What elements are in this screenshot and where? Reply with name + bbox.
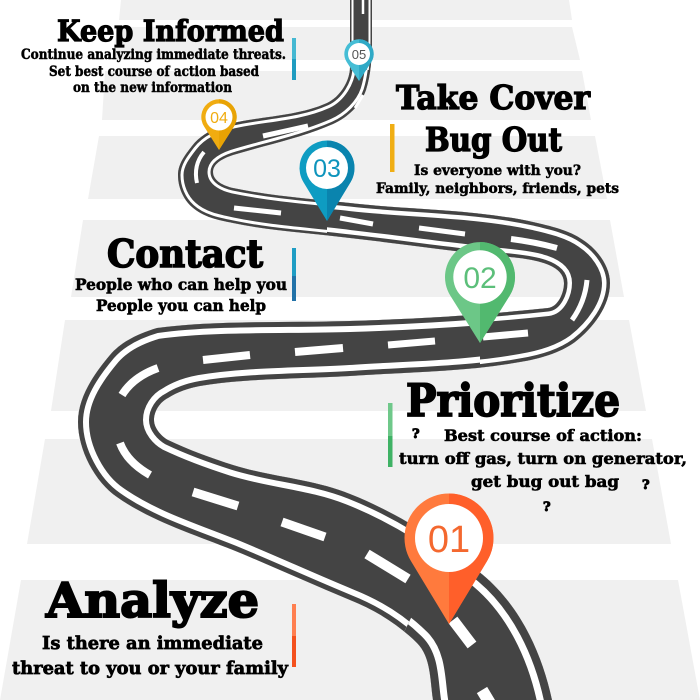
- road centre dashes: [120, 0, 587, 700]
- pin 03: 03: [313, 155, 341, 183]
- text block: prioritize: Prioritize: [406, 374, 620, 427]
- accent bar: contact: [292, 248, 296, 301]
- text block: keep informed: on the new information: [73, 80, 232, 96]
- text block: prioritize: get bug out bag: [471, 472, 619, 491]
- accent bar: analyze: [292, 604, 296, 667]
- pin 05: [344, 39, 374, 81]
- pin 05: 05: [352, 47, 366, 62]
- text block: take cover, bug out: Bug Out: [425, 120, 562, 159]
- text block: keep informed: Set best course of action based: [49, 64, 259, 80]
- text block: take cover, bug out: Family, neighbors, friends, pets: [376, 181, 619, 197]
- text block: contact: People who can help you: [75, 275, 287, 294]
- pin 02: [445, 242, 515, 343]
- accent bar: prioritize: [388, 403, 392, 467]
- pin 01: [405, 494, 494, 624]
- text block: keep informed: Keep Informed: [57, 14, 284, 48]
- text block: take cover, bug out: Is everyone with you?: [414, 163, 581, 179]
- pin 01: 01: [428, 519, 470, 561]
- text block: contact: People you can help: [96, 296, 266, 315]
- accent bar: keep informed: [292, 38, 296, 80]
- pin 02: 02: [463, 262, 497, 295]
- text block: prioritize: ?: [642, 478, 650, 493]
- winding road: [78, 0, 610, 700]
- text block: keep informed: [21, 14, 286, 96]
- text block: analyze: threat to you or your family: [12, 658, 289, 679]
- accent bar: take cover: [390, 124, 394, 172]
- text block: analyze: Is there an immediate: [42, 633, 263, 654]
- text block: prioritize: Best course of action:: [444, 426, 642, 445]
- text block: prioritize: turn off gas, turn on generator,: [399, 449, 687, 468]
- text block: prioritize: ?: [412, 427, 420, 442]
- pin 04: [201, 99, 237, 150]
- text block: prioritize: [399, 374, 687, 515]
- text block: take cover, bug out: [376, 78, 619, 197]
- pin 04: 04: [210, 110, 228, 127]
- text block: keep informed: Continue analyzing immediate threats.: [21, 47, 286, 63]
- pin 03: [300, 140, 355, 221]
- text block: take cover, bug out: Take Cover: [396, 78, 591, 117]
- text block: analyze: [12, 573, 289, 679]
- text block: analyze: Analyze: [45, 573, 259, 629]
- text block: prioritize: ?: [543, 500, 551, 515]
- text block: contact: Contact: [107, 231, 263, 276]
- text block: contact: [75, 231, 287, 315]
